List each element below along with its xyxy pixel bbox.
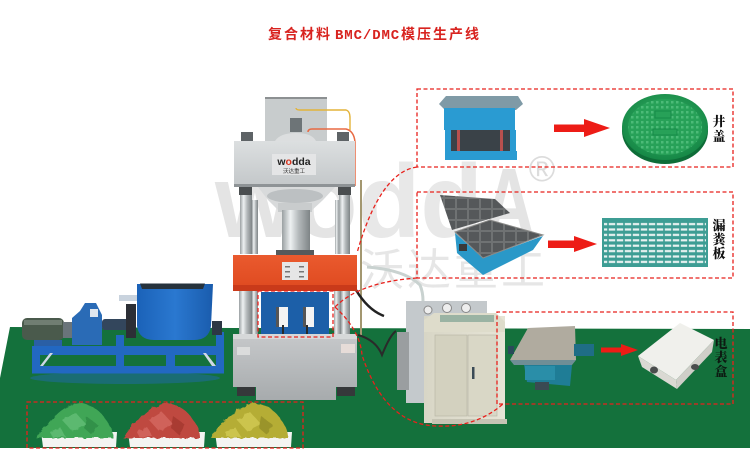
green floor [0, 327, 750, 448]
oil tank [265, 97, 327, 142]
manhole cover [622, 94, 708, 164]
mould 1 [439, 96, 523, 160]
mould 3 [508, 326, 594, 390]
watermark: wodda logo: wodd [214, 144, 483, 260]
meter box [638, 323, 714, 389]
product label [714, 336, 728, 379]
product label: 盒 [714, 364, 728, 379]
watermark: wodda logo [214, 144, 555, 295]
motor [22, 318, 73, 346]
product label: 漏 [712, 218, 726, 233]
logo: 沃达重工 [283, 167, 305, 175]
crown [234, 141, 355, 187]
logo [272, 154, 316, 175]
logo: wodda [276, 156, 311, 168]
dashed callout frames and connectors [27, 89, 733, 448]
product panel: slatted floor [440, 195, 727, 275]
hopper [137, 284, 213, 340]
lower columns [239, 291, 252, 336]
title: BMC/DMC [335, 28, 400, 44]
yellow pile [211, 403, 292, 447]
hoses [360, 180, 362, 335]
hydraulic power unit and control cabinet [397, 301, 507, 424]
title: 复合材料 [268, 26, 332, 42]
slatted floor panel [602, 218, 708, 267]
product label [712, 114, 726, 144]
arrow [548, 236, 597, 252]
product label: 板 [712, 246, 726, 261]
title: 模压生产线 [401, 26, 481, 42]
product label: 电 [714, 336, 728, 351]
product label: 井 [712, 114, 726, 129]
product label: 粪 [712, 232, 727, 248]
machine: four-column press [233, 97, 423, 400]
central cylinder [258, 187, 335, 212]
product label: 盖 [712, 129, 726, 144]
red slide [233, 255, 357, 285]
arrow [601, 344, 638, 356]
watermark: wodda logo: ® [529, 148, 555, 189]
machine: blue mixer [22, 284, 224, 384]
watermark: wodda logo: A [483, 148, 535, 257]
gearbox [72, 303, 102, 345]
frame [32, 332, 224, 374]
red pile [123, 403, 205, 447]
mould 2 [440, 195, 543, 275]
arrow [554, 119, 610, 137]
base [233, 335, 357, 400]
raw materials: BMC compound piles [36, 403, 292, 447]
green pile [36, 403, 117, 447]
product panel: meter box [508, 323, 728, 390]
product label [712, 218, 727, 261]
blue mould [261, 292, 329, 337]
product panel: manhole cover [439, 94, 726, 164]
product label: 表 [714, 350, 728, 365]
columns [240, 192, 252, 254]
watermark: wodda logo: 沃达重工 [360, 246, 545, 295]
